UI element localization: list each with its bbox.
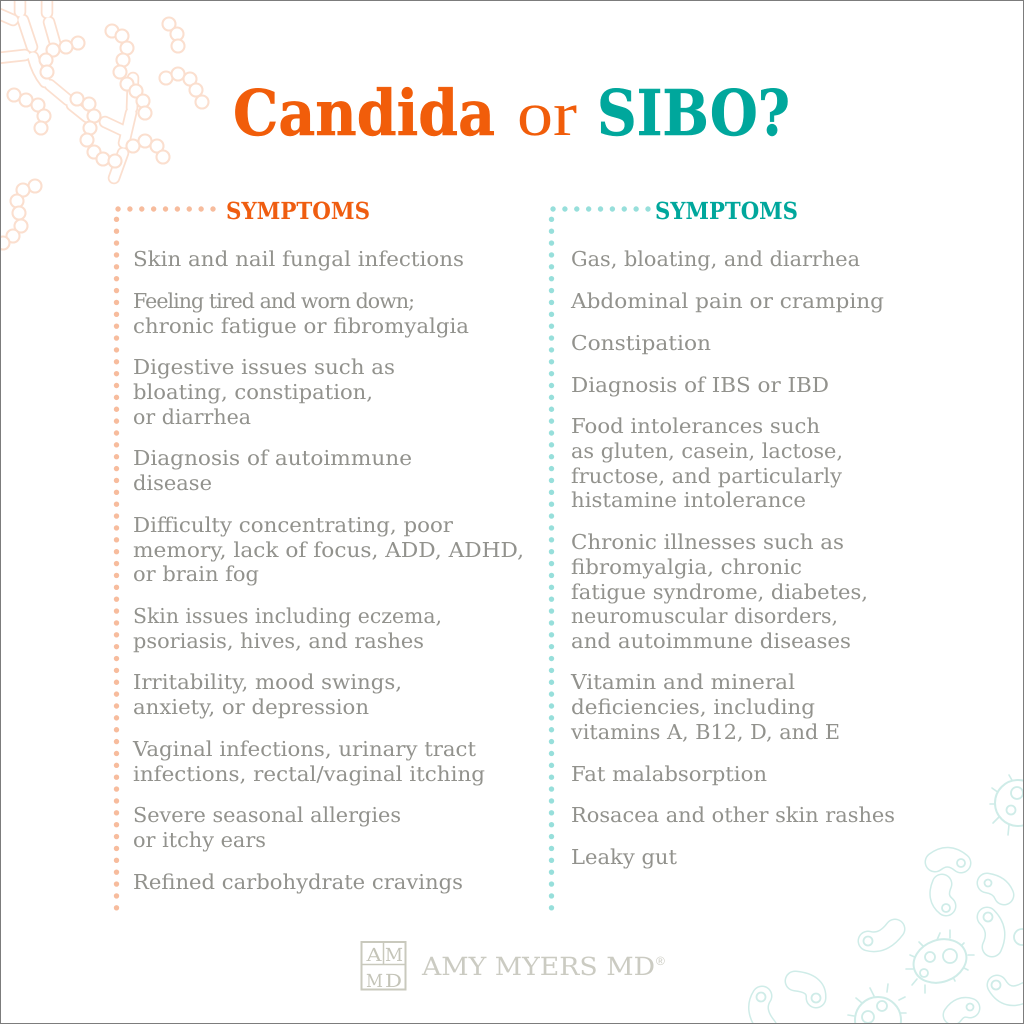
heading: candida symptoms: SYMPTOMS <box>226 197 370 225</box>
logo: Amy Myers MD <box>361 942 665 992</box>
list: SIBO symptoms: and autoimmune diseases <box>571 629 851 653</box>
list: SIBO symptoms: as gluten, casein, lactose, <box>571 439 843 463</box>
list: SIBO symptoms: Fat malabsorption <box>571 762 767 786</box>
list: candida symptoms: Diagnosis of autoimmune <box>133 446 412 470</box>
list: candida symptoms: Skin issues including eczema, <box>133 604 442 628</box>
list: candida symptoms: memory, lack of focus, ADD, ADHD, <box>133 538 524 562</box>
list: candida symptoms: or brain fog <box>133 562 259 586</box>
list: SIBO symptoms: Vitamin and mineral <box>570 670 795 694</box>
dotted border: candida <box>116 209 213 908</box>
logo mark: D <box>385 971 402 992</box>
dotted border: SIBO <box>552 209 648 908</box>
registered mark: ® <box>656 954 665 968</box>
list: candida symptoms: Difficulty concentrating, poor <box>133 513 453 537</box>
decoration: SIBO bacteria <box>756 775 1024 1024</box>
decoration: candida yeast chains <box>0 0 208 250</box>
list: SIBO symptoms: Abdominal pain or cramping <box>570 289 884 313</box>
list: SIBO symptoms: fructose, and particularly <box>571 464 842 488</box>
heading: SIBO symptoms: SYMPTOMS <box>655 197 798 225</box>
list: SIBO symptoms: histamine intolerance <box>571 488 806 512</box>
list: candida symptoms: infections, rectal/vaginal itching <box>133 762 485 786</box>
list: SIBO symptoms: Diagnosis of IBS or IBD <box>571 373 829 397</box>
logo mark: M <box>385 945 403 966</box>
list: SIBO symptoms: Constipation <box>571 331 711 355</box>
list: SIBO symptoms <box>570 247 895 869</box>
logo mark <box>361 942 406 992</box>
list: candida symptoms <box>132 247 524 894</box>
list: SIBO symptoms: Gas, bloating, and diarrhea <box>571 247 860 271</box>
list: candida symptoms: Refined carbohydrate cravings <box>133 870 463 894</box>
list: candida symptoms: psoriasis, hives, and rashes <box>133 629 424 653</box>
list: candida symptoms: Skin and nail fungal infections <box>133 247 464 271</box>
list: candida symptoms: bloating, constipation, <box>133 380 373 404</box>
list: candida symptoms: or itchy ears <box>133 828 266 852</box>
list: SIBO symptoms: Leaky gut <box>571 845 678 869</box>
list: candida symptoms: chronic fatigue or fibromyalgia <box>133 314 469 338</box>
logo wordmark: AMY MYERS MD <box>421 952 655 981</box>
list: candida symptoms: Irritability, mood swings, <box>133 670 402 694</box>
title: SIBO? <box>597 76 790 150</box>
panel: candida symptoms <box>116 197 524 908</box>
logo mark: M <box>366 971 383 992</box>
list: SIBO symptoms: Food intolerances such <box>571 414 820 438</box>
list: candida symptoms: Severe seasonal allergies <box>133 803 401 827</box>
title: or <box>517 79 577 149</box>
list: candida symptoms: or diarrhea <box>133 405 251 429</box>
list: SIBO symptoms: Rosacea and other skin rashes <box>571 803 895 827</box>
list: SIBO symptoms: neuromuscular disorders, <box>571 604 838 628</box>
list: SIBO symptoms: fibromyalgia, chronic <box>571 555 802 579</box>
title: Candida <box>233 76 495 150</box>
list: candida symptoms: anxiety, or depression <box>133 695 369 719</box>
list: SIBO symptoms: fatigue syndrome, diabetes, <box>571 580 868 604</box>
panel: SIBO symptoms <box>552 197 895 908</box>
list: candida symptoms: disease <box>133 471 212 495</box>
list: candida symptoms: Vaginal infections, urinary tract <box>132 737 477 761</box>
list: SIBO symptoms: Chronic illnesses such as <box>571 530 844 554</box>
list: SIBO symptoms: deficiencies, including <box>571 695 815 719</box>
list: SIBO symptoms: vitamins A, B12, D, and E <box>570 720 840 744</box>
list: candida symptoms: Digestive issues such as <box>133 355 395 379</box>
logo mark: A <box>365 945 383 966</box>
list: candida symptoms: Feeling tired and worn down; <box>133 289 415 313</box>
title <box>233 76 790 150</box>
